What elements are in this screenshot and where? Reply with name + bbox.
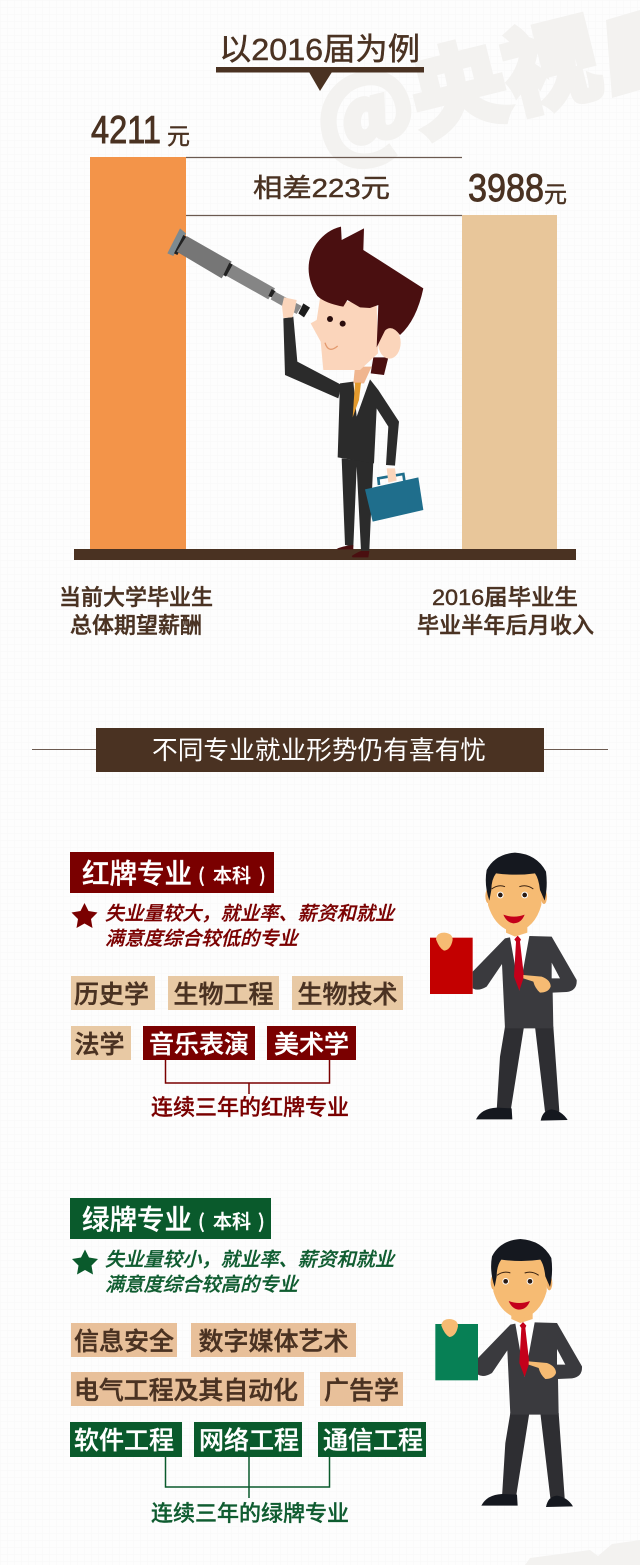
description: 满意度综合较低的专业 [105, 923, 300, 951]
illustration: man with red card [430, 853, 577, 1121]
chip: 音乐表演: 音乐表演 [149, 1025, 249, 1061]
face [311, 298, 378, 370]
bar chart: expected vs actual salary [74, 109, 576, 560]
hair [486, 853, 547, 901]
chip: 广告学: 广告学 [324, 1371, 399, 1407]
chip: 生物技术: 生物技术 [297, 975, 398, 1011]
card [435, 1324, 478, 1380]
section heading [32, 728, 608, 772]
baseline [74, 549, 576, 560]
bar: actual income [462, 215, 557, 549]
legs [502, 1413, 565, 1498]
value: 4211: 元 [167, 123, 190, 149]
label: expected salary: 总体期望薪酬 [70, 608, 202, 640]
section heading: 不同专业就业形势仍有喜有忧 [152, 730, 486, 767]
illustration: man with green card [435, 1239, 582, 1507]
connector and caption [151, 1060, 349, 1122]
value: 3988: 元 [544, 181, 567, 207]
shirt [515, 1320, 535, 1378]
eyes, brows and mouth [497, 1272, 539, 1310]
face [493, 1260, 548, 1319]
eyes and smile [325, 316, 346, 349]
description [105, 898, 396, 951]
title: 以2016届为例 [219, 32, 420, 67]
label: expected salary [59, 580, 213, 640]
connector and caption: 连续三年的绿牌专业 [151, 1496, 349, 1528]
neck [511, 1311, 533, 1323]
hair [309, 227, 423, 347]
chip: 信息安全: 信息安全 [74, 1322, 174, 1358]
shirt [509, 934, 530, 992]
thumb [436, 933, 453, 951]
label: actual income [417, 585, 594, 638]
heading: red card [70, 851, 274, 893]
shoes [336, 545, 369, 557]
card [430, 938, 473, 994]
heading: green card: ( [198, 1207, 205, 1234]
chip: 电气工程及其自动化: 电气工程及其自动化 [74, 1371, 298, 1407]
description: 满意度综合较高的专业 [105, 1269, 300, 1297]
icon: star [72, 903, 98, 928]
jacket [478, 1322, 582, 1415]
description: 失业量较小，就业率、薪资和就业 [105, 1244, 396, 1272]
description: 失业量较大，就业率、薪资和就业 [105, 898, 396, 926]
pointing hand [529, 1361, 556, 1379]
icon: star [72, 1250, 98, 1274]
face [488, 873, 543, 933]
value: 4211: 4211 [91, 109, 161, 152]
neck [353, 367, 372, 383]
heading: red card: ( [198, 861, 205, 888]
connector and caption: 连续三年的红牌专业 [151, 1090, 349, 1122]
heading: green card: 绿牌专业 [82, 1197, 192, 1237]
chip: 网络工程: 网络工程 [199, 1421, 299, 1457]
label: actual income: 毕业半年后月收入 [417, 613, 594, 638]
ears [491, 1275, 497, 1290]
bar: expected salary [90, 157, 186, 549]
label: actual income: 2016届毕业生 [432, 585, 578, 610]
eyes, brows and mouth [492, 886, 533, 923]
chip: 历史学: 历史学 [74, 975, 149, 1011]
value: 3988: 3988 [468, 167, 544, 210]
heading: red card: 红牌专业 [82, 851, 192, 891]
jacket [338, 379, 399, 466]
chip: 法学: 法学 [74, 1025, 125, 1061]
title [216, 32, 424, 91]
heading: green card: 本科 [213, 1207, 251, 1234]
heading: red card: ) [259, 861, 266, 888]
neck [506, 925, 527, 937]
hair [491, 1239, 552, 1287]
heading: green card [70, 1197, 271, 1239]
heading: green card: ) [258, 1207, 265, 1234]
chip: 数字媒体艺术: 数字媒体艺术 [198, 1322, 349, 1358]
heading: red card: 本科 [213, 861, 251, 888]
shoes [481, 1494, 573, 1507]
legs [342, 458, 373, 551]
shoes [476, 1108, 568, 1121]
briefcase [365, 468, 423, 522]
tie [519, 1322, 529, 1377]
raised arm [283, 317, 342, 398]
jacket [473, 936, 577, 1028]
description [105, 1244, 396, 1297]
hand [282, 297, 297, 318]
illustration: man with telescope [167, 227, 423, 557]
chip: 通信工程: 通信工程 [323, 1421, 423, 1457]
pointing hand [523, 975, 551, 993]
watermark: bottom [525, 1540, 640, 1565]
legs [497, 1027, 559, 1112]
chip: 美术学: 美术学 [274, 1025, 349, 1061]
icon: telescope [167, 228, 310, 317]
ears [485, 889, 491, 903]
panel: green-card majors [70, 1197, 426, 1528]
chip: 生物工程: 生物工程 [173, 975, 274, 1011]
label: expected salary: 当前大学毕业生 [59, 580, 213, 612]
panel: red-card majors [70, 851, 403, 1122]
tie [514, 936, 524, 991]
connector and caption [151, 1457, 349, 1528]
thumb [441, 1319, 458, 1337]
difference bracket: 相差223元 [253, 173, 390, 203]
chip: 软件工程: 软件工程 [74, 1421, 174, 1457]
tie [353, 383, 361, 417]
back hair [371, 357, 388, 375]
ear [378, 327, 401, 359]
